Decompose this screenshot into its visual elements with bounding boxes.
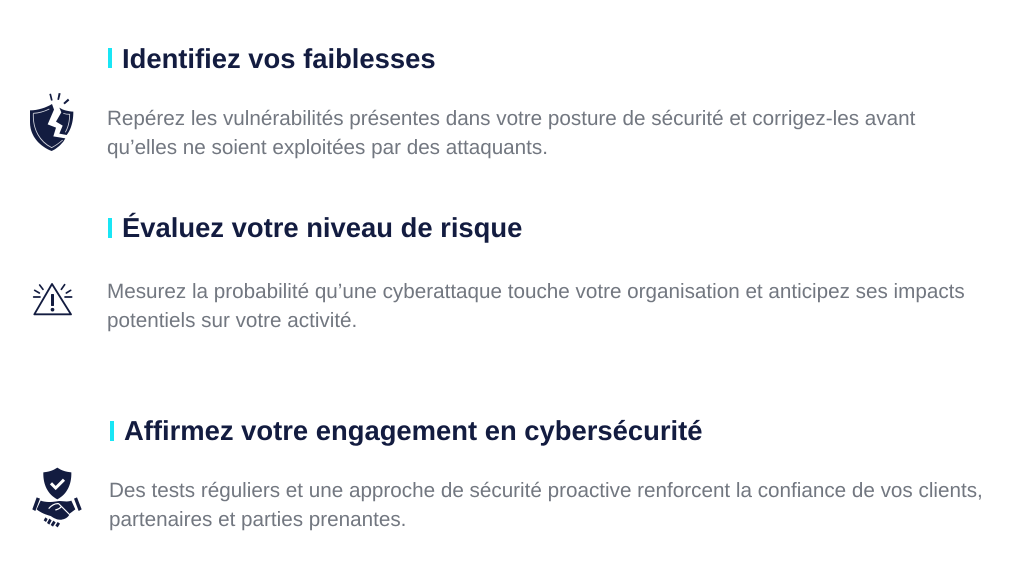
icon: shield with check and handshake — [32, 468, 82, 528]
text: section 1 description — [107, 107, 916, 159]
text: section 2 description: potentiels sur votre activité. — [107, 309, 357, 332]
text: section 2 description: Mesurez la probabilité qu’une cyberattaque touche votre organisation et anticipez ses impacts — [107, 280, 965, 303]
text: section 1 description: Repérez les vulnérabilités présentes dans votre posture de sécurité et corrigez-les avant — [107, 107, 915, 130]
text: section 3 description: partenaires et parties prenantes. — [109, 508, 406, 531]
accent bar: section 2 — [108, 218, 112, 238]
heading: Affirmez votre engagement en cybersécurité: Affirmez votre engagement en cybersécurité — [124, 415, 702, 446]
icon: warning triangle — [32, 283, 72, 316]
text: section 3 description — [109, 479, 983, 531]
accent bar: section 3 — [110, 421, 114, 441]
icon: cracked shield — [30, 93, 74, 151]
heading: Identifiez vos faiblesses: Identifiez vos faiblesses — [122, 43, 436, 74]
text: section 1 description: qu’elles ne soient exploitées par des attaquants. — [107, 136, 548, 159]
text: section 2 description — [107, 280, 965, 332]
text: section 3 description: Des tests réguliers et une approche de sécurité proactive renforcent la confiance de vos clients, — [109, 479, 983, 502]
heading: Évaluez votre niveau de risque: Évaluez votre niveau de risque — [122, 212, 522, 243]
accent bar: section 1 — [108, 48, 112, 68]
